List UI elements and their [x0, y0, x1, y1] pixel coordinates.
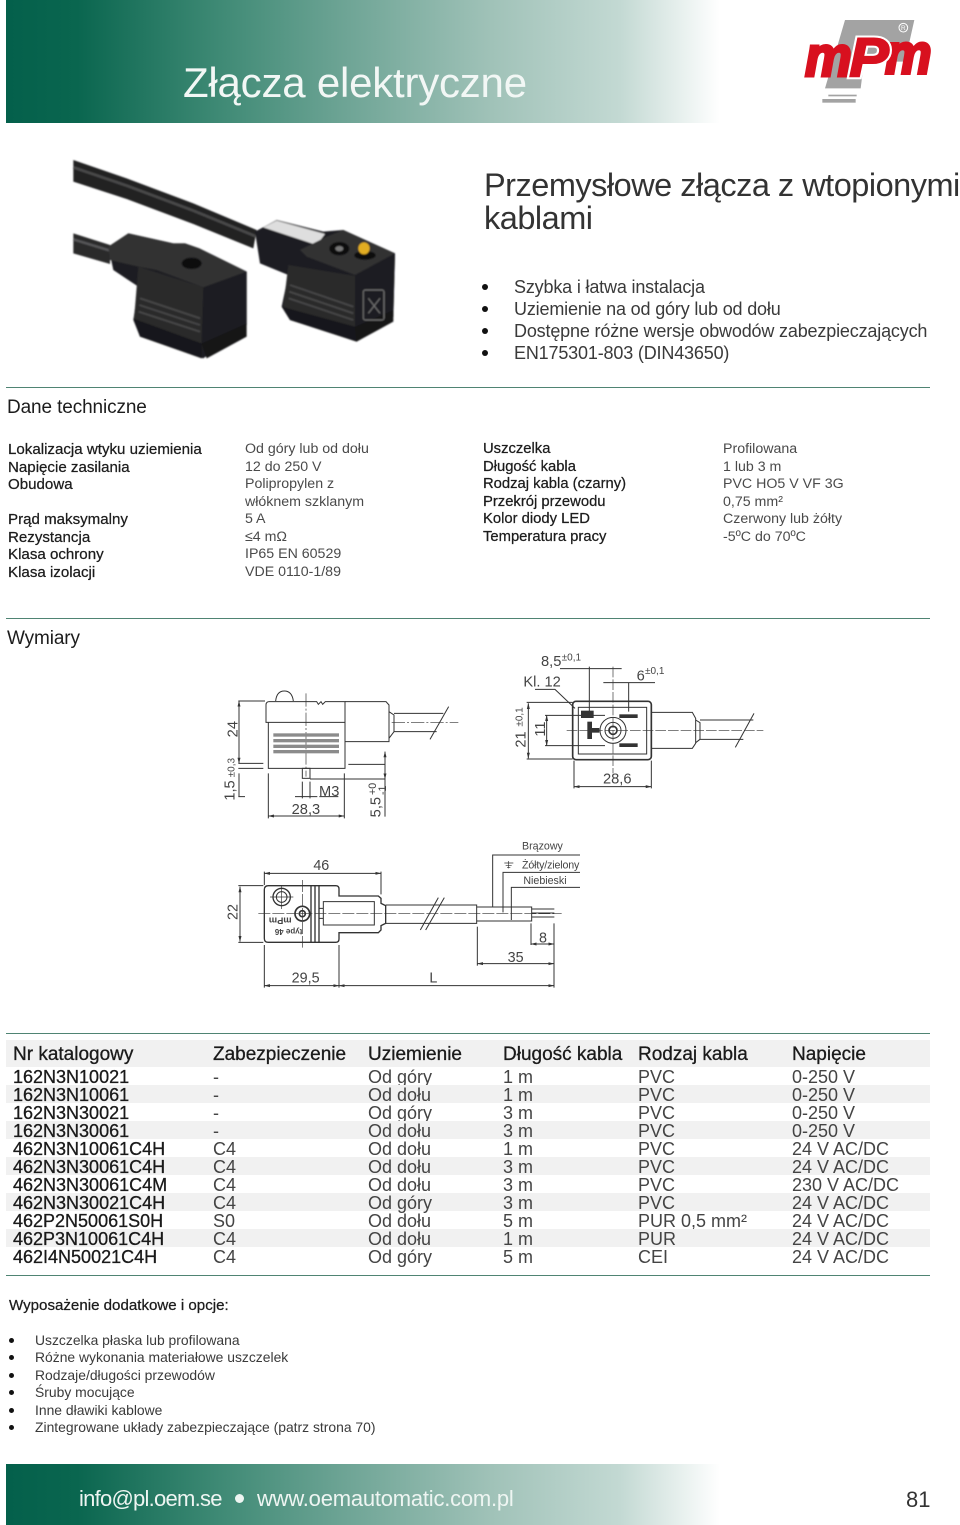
dimension labels: 29,5 [292, 971, 320, 987]
spec labels right: Kolor diody LED [483, 511, 590, 527]
dimension labels: 5,5 [369, 797, 385, 817]
table: catalogue numbers: PVC [638, 1193, 675, 1213]
drawing: top view with wire legend: mPm [269, 915, 292, 925]
drawing: side view [223, 690, 458, 818]
heading: dimensions: Wymiary [7, 628, 80, 649]
spec labels left: Lokalizacja wtyku uziemienia [8, 441, 202, 458]
dimension labels: 35 [508, 950, 524, 966]
dimension labels: ±0,1 [645, 666, 665, 677]
dimension labels: 24 [226, 721, 242, 737]
drawing: top view with wire legend: type 46 [274, 927, 302, 936]
logo: mPm: R [901, 25, 906, 32]
page number: 81 [906, 1487, 930, 1512]
table: catalogue numbers: 3 m [503, 1103, 533, 1123]
table: catalogue numbers: 462N3N30061C4H [13, 1157, 165, 1177]
table: catalogue numbers: 162N3N30021 [13, 1103, 129, 1123]
spec values right [723, 441, 844, 544]
table: catalogue numbers: 24 V AC/DC [792, 1193, 889, 1213]
spec labels right: Przekrój przewodu [483, 494, 606, 510]
dimension labels: 28,3 [292, 802, 320, 818]
options list: Zintegrowane układy zabezpieczające (patrz strona 70) [35, 1419, 376, 1435]
table: catalogue numbers: C4 [213, 1157, 236, 1177]
logo: mPm [804, 20, 932, 103]
product heading: Przemysłowe złącza z wtopionymi [484, 167, 960, 203]
spec values left: ≤4 mΩ [245, 528, 287, 544]
spec labels right [483, 441, 626, 544]
table: catalogue numbers: 24 V AC/DC [792, 1139, 889, 1159]
table: catalogue numbers: Od dołu [368, 1157, 431, 1177]
table: catalogue numbers: Od góry [368, 1247, 432, 1267]
table: catalogue numbers: 230 V AC/DC [792, 1175, 899, 1195]
spec values right: PVC HO5 V VF 3G [723, 476, 844, 492]
feature bullets: EN175301-803 (DIN43650) [514, 343, 729, 363]
product heading: kablami [484, 200, 592, 236]
feature bullets: Dostępne różne wersje obwodów zabezpieczających [514, 321, 927, 341]
table: catalogue numbers: 5 m [503, 1247, 533, 1267]
table: catalogue numbers: Od góry [368, 1103, 432, 1123]
table header: Długość kabla [503, 1044, 622, 1065]
table: catalogue numbers: 1 m [503, 1139, 533, 1159]
wire legend: Niebieski [523, 875, 567, 887]
table: catalogue numbers: 1 m [503, 1067, 533, 1087]
spec labels left: Napięcie zasilania [8, 458, 130, 476]
spec values left: 12 do 250 V [245, 458, 322, 474]
table: catalogue numbers: CEI [638, 1247, 668, 1267]
table: catalogue numbers: 3 m [503, 1157, 533, 1177]
table: catalogue numbers: 1 m [503, 1229, 533, 1249]
table: catalogue numbers: PUR [638, 1229, 676, 1249]
table: catalogue numbers: Od dołu [368, 1175, 431, 1195]
dimension labels: 22 [226, 904, 242, 920]
table: catalogue numbers: 3 m [503, 1193, 533, 1213]
table: catalogue numbers: 3 m [503, 1175, 533, 1195]
footer contact [79, 1486, 514, 1511]
table: catalogue numbers: Od dołu [368, 1139, 431, 1159]
spec values right: Profilowana [723, 441, 797, 457]
spec labels right: Uszczelka [483, 441, 550, 457]
spec values left: włóknem szklanym [245, 494, 364, 510]
table: catalogue numbers: 0-250 V [792, 1103, 855, 1123]
table: catalogue numbers: 462N3N30021C4H [13, 1193, 165, 1213]
dimension labels: ±0,3 [227, 758, 238, 777]
right connector [255, 220, 395, 342]
spec values left: Od góry lub od dołu [245, 441, 369, 457]
spec values right: Czerwony lub żółty [723, 511, 842, 527]
dimension labels: L [429, 971, 437, 987]
table: catalogue numbers: PVC [638, 1067, 675, 1087]
spec labels right: Temperatura pracy [483, 528, 606, 544]
dimension labels: 28,6 [603, 772, 632, 788]
table: catalogue numbers: 0-250 V [792, 1121, 855, 1141]
table: catalogue numbers: 462P3N10061C4H [13, 1229, 164, 1249]
spec values left [245, 441, 369, 580]
spec values left: Polipropylen z [245, 476, 334, 492]
table: catalogue numbers: 0-250 V [792, 1085, 855, 1105]
logo: mPm: P [849, 27, 889, 89]
table: catalogue numbers: Od góry [368, 1067, 432, 1087]
footer contact: info@pl.oem.se [79, 1486, 222, 1511]
wire legend: Brązowy [522, 840, 564, 852]
table: catalogue numbers: - [213, 1121, 219, 1141]
dimension labels [514, 653, 665, 788]
options list: Inne dławiki kablowe [35, 1402, 162, 1418]
footer contact: www.oemautomatic.com.pl [257, 1486, 514, 1511]
table: catalogue numbers: Od góry [368, 1193, 432, 1213]
table: catalogue numbers: 24 V AC/DC [792, 1247, 889, 1267]
table: catalogue numbers: Od dołu [368, 1085, 431, 1105]
spec values right: 0,75 mm² [723, 494, 783, 510]
table: catalogue numbers: - [213, 1085, 219, 1105]
logo: mPm: P [849, 27, 889, 89]
table: catalogue numbers: PUR 0,5 mm² [638, 1211, 747, 1231]
table: catalogue numbers: PVC [638, 1085, 675, 1105]
table: catalogue numbers: - [213, 1067, 219, 1087]
spec values left: 5 A [245, 511, 266, 527]
table: catalogue numbers: C4 [213, 1247, 236, 1267]
table header: Uziemienie [368, 1044, 462, 1065]
heading: options: Wyposażenie dodatkowe i opcje: [9, 1297, 229, 1314]
options list [9, 1332, 376, 1435]
dimension labels: +0 [367, 783, 379, 795]
spec labels left: Rezystancja [8, 528, 90, 546]
table: catalogue numbers: 162N3N30061 [13, 1121, 129, 1141]
table: catalogue numbers: PVC [638, 1175, 675, 1195]
logo: mPm: m [885, 23, 932, 86]
table: catalogue numbers: C4 [213, 1175, 236, 1195]
footer band [6, 1464, 720, 1525]
dimension labels: ±0,1 [515, 707, 526, 727]
wire legend: Żółty/zielony [522, 858, 580, 871]
table header [6, 1040, 930, 1067]
table: catalogue numbers: 1 m [503, 1085, 533, 1105]
dimension labels: 46 [313, 858, 329, 874]
dimension labels: ±0,1 [562, 653, 581, 664]
dimension labels: Kl. 12 [523, 674, 561, 690]
table: catalogue numbers: 462I4N50021C4H [13, 1247, 157, 1267]
product heading [484, 167, 960, 236]
spec labels right: Długość kabla [483, 458, 576, 474]
dimension labels: 6 [637, 669, 645, 685]
table: catalogue numbers: 162N3N10021 [13, 1067, 129, 1087]
table: catalogue numbers: 462N3N10061C4H [13, 1139, 165, 1159]
dimension labels [223, 721, 389, 818]
spec values right: -5ºC do 70ºC [723, 528, 806, 544]
dimension labels: 8,5 [541, 654, 561, 670]
table header: Rodzaj kabla [638, 1044, 748, 1065]
spec labels left: Klasa ochrony [8, 546, 104, 563]
table: catalogue numbers: 162N3N10061 [13, 1085, 129, 1105]
heading: technical data: Dane techniczne [7, 397, 147, 418]
feature bullets: Uziemienie na od góry lub od dołu [514, 299, 781, 319]
spec values right: 1 lub 3 m [723, 458, 781, 474]
table header: Napięcie [792, 1044, 866, 1065]
table: catalogue numbers: PVC [638, 1103, 675, 1123]
spec values left: IP65 EN 60529 [245, 546, 341, 562]
table header: Nr katalogowy [13, 1044, 133, 1065]
table: catalogue numbers: 24 V AC/DC [792, 1157, 889, 1177]
feature bullets [482, 277, 927, 363]
options list: Rodzaje/długości przewodów [35, 1367, 215, 1383]
table: catalogue numbers: 462P2N50061S0H [13, 1211, 163, 1231]
spec labels right: Rodzaj kabla (czarny) [483, 476, 626, 492]
spec labels left: Klasa izolacji [8, 564, 95, 580]
product photo: two connectors with cables [72, 159, 396, 360]
table: catalogue numbers: 5 m [503, 1211, 533, 1231]
table: catalogue numbers: Od dołu [368, 1121, 431, 1141]
dimension labels [226, 858, 547, 987]
spec labels left [8, 441, 202, 580]
table: catalogue numbers: 3 m [503, 1121, 533, 1141]
table: catalogue numbers: C4 [213, 1139, 236, 1159]
table: catalogue numbers: Od dołu [368, 1211, 431, 1231]
table: catalogue numbers: C4 [213, 1193, 236, 1213]
left connector [108, 233, 247, 358]
spec values left: VDE 0110-1/89 [245, 564, 341, 580]
table: catalogue numbers: S0 [213, 1211, 235, 1231]
header band [6, 0, 720, 123]
table: catalogue numbers: 0-250 V [792, 1067, 855, 1087]
options list: Różne wykonania materiałowe uszczelek [35, 1349, 288, 1365]
table: catalogue numbers: Od dołu [368, 1229, 431, 1249]
table: catalogue numbers: PVC [638, 1157, 675, 1177]
options list: Śruby mocujące [35, 1384, 135, 1400]
spec labels left: Obudowa [8, 476, 73, 493]
dimension labels: 21 [514, 731, 530, 748]
dimension labels: 11 [533, 721, 549, 737]
logo: mPm: m [805, 26, 852, 89]
table: catalogue numbers: PVC [638, 1121, 675, 1141]
table: catalogue numbers: 24 V AC/DC [792, 1229, 889, 1249]
dimension labels: 8 [539, 930, 547, 946]
feature bullets: Szybka i łatwa instalacja [514, 277, 705, 297]
table header: Zabezpieczenie [213, 1044, 346, 1065]
drawing: front view [514, 653, 764, 788]
wire legend [522, 840, 580, 887]
table: catalogue numbers: - [213, 1103, 219, 1123]
spec labels left: Prąd maksymalny [8, 511, 128, 528]
dimension labels: M3 [319, 784, 339, 800]
dimension labels: -1 [377, 785, 389, 795]
table: catalogue numbers: PVC [638, 1139, 675, 1159]
table: catalogue numbers: 462N3N30061C4M [13, 1175, 167, 1195]
dimension labels: 1,5 [223, 780, 239, 801]
drawing: top view with wire legend [226, 840, 580, 988]
options list: Uszczelka płaska lub profilowana [35, 1332, 240, 1348]
table: catalogue numbers: 24 V AC/DC [792, 1211, 889, 1231]
page title: Złącza elektryczne [183, 59, 527, 106]
table: catalogue numbers: C4 [213, 1229, 236, 1249]
